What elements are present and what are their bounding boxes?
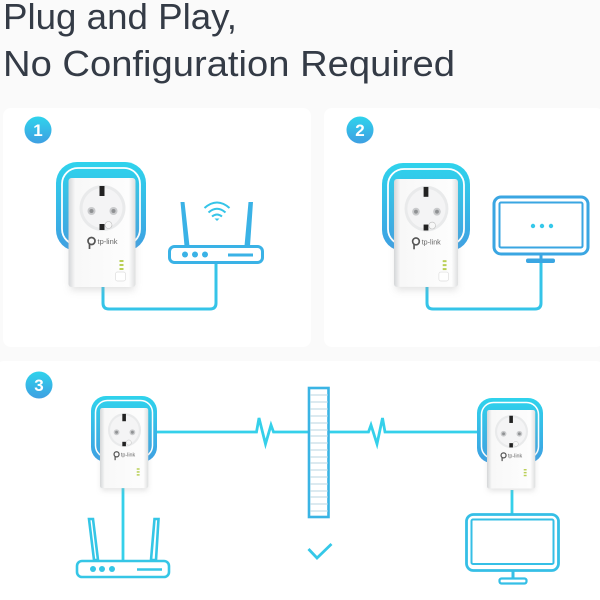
socket frame right — [477, 398, 543, 463]
monitor — [466, 514, 558, 584]
panel: step 3 — [0, 361, 600, 600]
title — [3, 0, 455, 84]
powerline adapter left — [100, 408, 148, 490]
powerline adapter right: tp-link — [508, 454, 523, 460]
cable to router — [122, 488, 124, 560]
router — [77, 519, 169, 577]
badge: 2 — [346, 116, 374, 144]
title: No Configuration Required — [3, 43, 455, 84]
powerline adapter: tp-link — [98, 237, 118, 246]
icon: check mark — [308, 544, 332, 558]
badge: 3: 3 — [34, 376, 44, 395]
signal line left with pulse — [157, 418, 308, 444]
powerline adapter left: tp-link — [121, 452, 136, 459]
cable to monitor — [511, 490, 513, 514]
cable to router — [103, 263, 216, 309]
badge: 1: 1 — [33, 121, 43, 140]
powerline adapter: tp-link — [422, 237, 441, 246]
socket frame left — [91, 396, 157, 462]
router — [170, 202, 262, 262]
signal line right with pulse — [329, 418, 477, 444]
badge: 2: 2 — [355, 121, 365, 140]
socket frame — [56, 162, 146, 251]
powerline adapter — [394, 179, 458, 290]
badge: 1 — [24, 116, 52, 144]
cable to monitor — [427, 263, 541, 309]
powerline adapter right — [487, 410, 535, 491]
wall — [309, 388, 328, 517]
powerline adapter — [68, 178, 136, 290]
icon: wifi — [204, 202, 230, 221]
panel: step 1 — [3, 108, 311, 347]
socket frame — [382, 163, 470, 251]
badge: 3 — [26, 372, 52, 398]
monitor — [494, 197, 588, 263]
panel: step 2 — [324, 108, 600, 347]
